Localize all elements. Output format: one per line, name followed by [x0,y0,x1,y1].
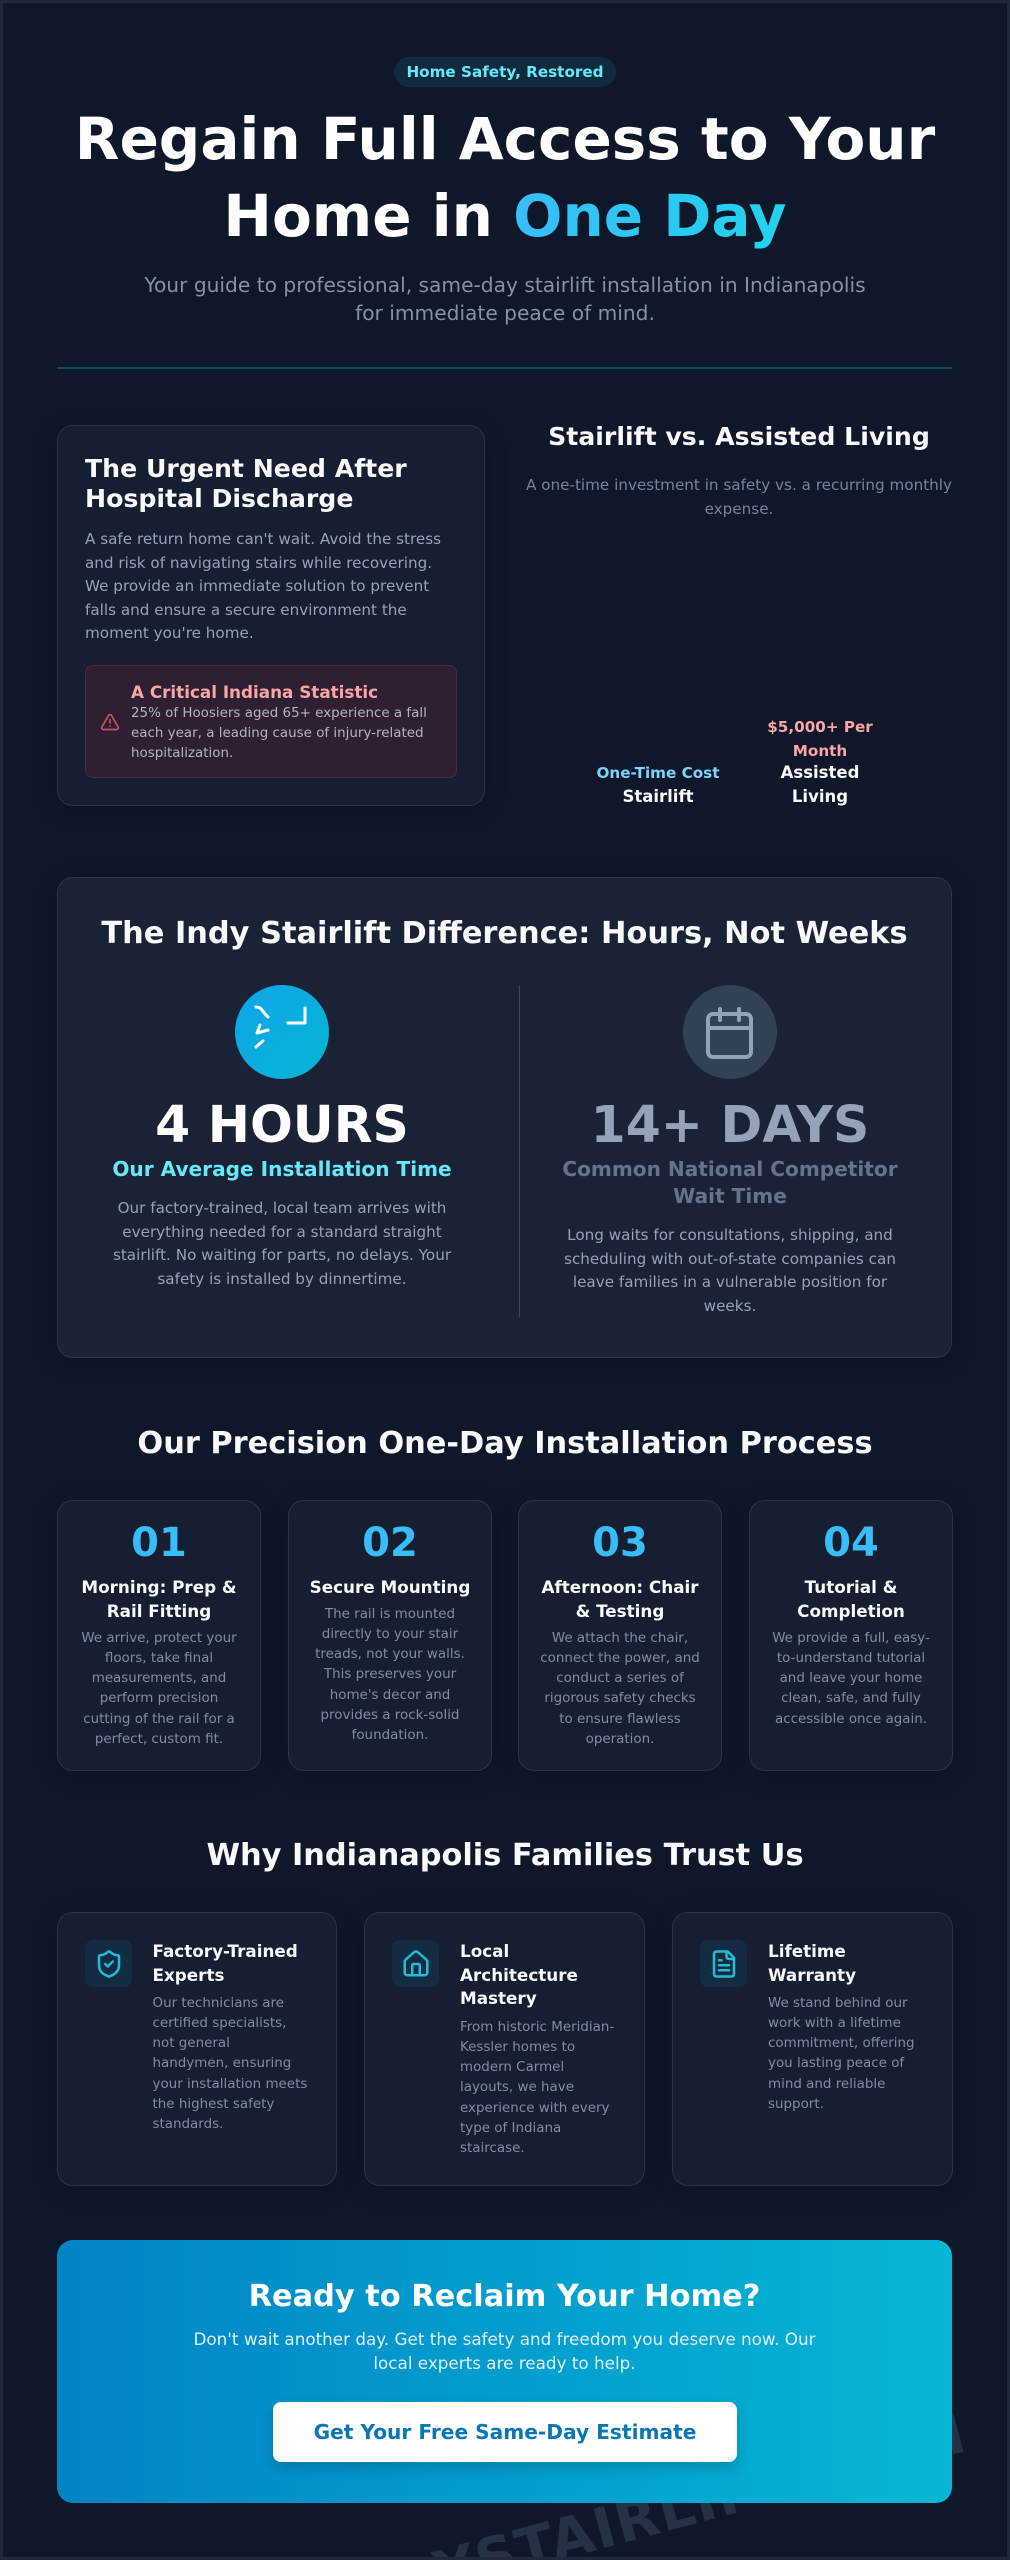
heading: difference: The Indy Stairlift Difference: Hours, Not Weeks [101,916,908,951]
stat description: stairlift. No waiting for parts, no delays. Your [113,1246,451,1264]
step text [540,1631,700,1747]
icon: clock circle [235,985,329,1079]
step text: We provide a full, easy- [772,1631,930,1646]
stat description [113,1199,452,1288]
callout text [131,706,427,761]
icon: document [700,1940,747,1987]
callout text: hospitalization. [131,746,233,761]
badge: home safety [394,57,616,87]
label: assisted living cost: Month [793,742,847,760]
text: urgent need body: A safe return home can't wait. Avoid the stress [85,530,441,548]
card text: you lasting peace of [768,2056,904,2071]
step text: operation. [586,1732,654,1747]
card title: Lifetime [768,1941,846,1961]
panel: step 1 [57,1500,261,1771]
stat: 14+ days: 14+ DAYS [591,1095,869,1154]
step number: 04 [823,1520,879,1566]
card text: handymen, ensuring [152,2056,291,2071]
step text: treads, not your walls. [315,1647,465,1662]
label: stairlift cost [597,764,720,806]
text: comparison subtitle [526,476,952,518]
icon: warning triangle [100,714,120,730]
heading: trust: Why Indianapolis Families Trust Us [206,1838,804,1873]
step text [772,1631,930,1727]
step text: conduct a series of [556,1671,684,1686]
step title [797,1577,905,1620]
card title: Mastery [460,1988,537,2008]
text: comparison subtitle: expense. [705,500,773,518]
step title: Completion [797,1600,905,1620]
card text [460,2020,614,2156]
step title: Afternoon: Chair [541,1577,699,1597]
card text: support. [768,2097,824,2112]
callout text: 25% of Hoosiers aged 65+ experience a fall [131,706,427,720]
card title [768,1941,856,1984]
stat description: safety is installed by dinnertime. [157,1270,407,1288]
card title: Experts [152,1964,224,1984]
step text: to-understand tutorial [777,1651,925,1666]
step text: perfect, custom fit. [95,1732,223,1747]
step text: directly to your stair [322,1627,458,1642]
text: call to action: Don't wait another day. Get the safety and freedom you deserve now. Our [193,2329,816,2349]
step text: rigorous safety checks [544,1691,696,1706]
icon: house [392,1940,439,1987]
card text: your installation meets [152,2077,307,2092]
card text: Kessler homes to [460,2040,575,2055]
step text: connect the power, and [540,1651,700,1666]
step title [541,1577,699,1620]
card text: From historic Meridian- [460,2020,614,2035]
callout heading: A Critical Indiana Statistic [131,682,378,702]
text: urgent need body [85,530,441,642]
icon: shield check [85,1940,132,1987]
text: urgent need body: moment you're home. [85,624,254,642]
stat description: leave families in a vulnerable position for [573,1273,887,1291]
stat: 4 hours: 4 HOURS [155,1095,409,1154]
label: assisted living cost [767,718,873,806]
step text: and leave your home [780,1671,922,1686]
panel: step 2 [288,1500,492,1771]
stat description: everything needed for a standard straight [122,1223,442,1241]
heading: urgent need [85,454,407,513]
title: Home in One Day [223,182,787,250]
heading: urgent need: The Urgent Need After [85,454,407,483]
panel: call to action [57,2240,952,2503]
text: urgent need body: and risk of navigating stairs while recovering. [85,554,432,572]
card text: the highest safety [152,2097,274,2112]
heading: urgent need: Hospital Discharge [85,484,353,513]
card text: layouts, we have [460,2080,574,2095]
card text: not general [152,2036,230,2051]
card text: type of Indiana [460,2121,561,2136]
step title: Rail Fitting [107,1600,211,1620]
step title: & Testing [576,1600,664,1620]
label: stairlift cost: Stairlift [622,787,694,806]
card text [768,1996,915,2112]
callout text: each year, a leading cause of injury-related [131,726,424,741]
text: urgent need body: falls and ensure a secure environment the [85,601,407,619]
step title: Tutorial & [805,1577,897,1597]
step text: perform precision [100,1691,218,1706]
callout: Indiana statistic [85,665,457,778]
panel: hours not weeks [57,877,952,1358]
column: competitor wait time [562,985,898,1315]
step number: 02 [362,1520,418,1566]
step text: floors, take final [105,1651,213,1666]
subtitle [144,273,866,324]
step title: Secure Mounting [310,1577,470,1597]
step text: We attach the chair, [552,1631,688,1646]
stat description: scheduling with out-of-state companies can [564,1250,896,1268]
step text: home's decor and [330,1688,450,1703]
stat description: Long waits for consultations, shipping, and [567,1226,893,1244]
card text: We stand behind our [768,1996,908,2011]
card title [152,1941,298,1984]
label: assisted living cost: Living [792,787,848,806]
panel: factory-trained experts [57,1912,337,2186]
step text: provides a rock-solid [321,1708,459,1723]
step text: clean, safe, and fully [781,1691,921,1706]
panel: step 4 [749,1500,953,1771]
card title: Local [460,1941,509,1961]
card text: standards. [152,2117,223,2132]
step text: measurements, and [92,1671,226,1686]
text: call to action: local experts are ready to help. [373,2353,636,2373]
stat description: Our factory-trained, local team arrives with [118,1199,446,1217]
step text: We arrive, protect your [81,1631,237,1646]
step number: 03 [592,1520,648,1566]
card text: experience with every [460,2101,610,2116]
text: call to action [193,2329,816,2373]
step text: cutting of the rail for a [83,1712,235,1727]
text: urgent need body: We provide an immediate solution to prevent [85,577,429,595]
panel: urgent need after hospital discharge [57,425,485,806]
step title: Morning: Prep & [81,1577,237,1597]
label: assisted living cost: Assisted [781,763,859,782]
card text: Our technicians are [152,1996,284,2011]
badge: home safety: Home Safety, Restored [406,63,604,81]
step text: The rail is mounted [325,1607,455,1622]
card text: commitment, offering [768,2036,915,2051]
button: free estimate: Get Your Free Same-Day Estimate [314,2420,696,2444]
step text: foundation. [352,1728,428,1743]
card title: Factory-Trained [152,1941,298,1961]
panel: step 3 [518,1500,722,1771]
step text: to ensure flawless [559,1712,681,1727]
card text: work with a lifetime [768,2016,901,2031]
card title: Warranty [768,1964,856,1984]
subtitle: for immediate peace of mind. [355,300,655,324]
card text: mind and reliable [768,2077,885,2092]
step text [315,1607,465,1743]
title: Regain Full Access to Your [75,105,935,173]
stat label [562,1157,898,1208]
heading: call to action: Ready to Reclaim Your Home? [249,2279,760,2314]
stat label: Our Average Installation Time [112,1157,452,1181]
title [75,105,936,250]
icon: calendar circle [683,985,777,1079]
column: our installation time [112,985,452,1288]
card text: staircase. [460,2141,525,2156]
label: stairlift cost: One-Time Cost [597,764,719,782]
stat description [564,1226,896,1315]
step title [81,1577,237,1620]
card title: Architecture [460,1964,578,1984]
card text [152,1996,307,2132]
stat label: Wait Time [673,1184,787,1208]
step text [81,1631,237,1747]
button: free estimate [273,2402,737,2462]
panel: local architecture mastery [364,1912,645,2186]
stat description: weeks. [704,1297,756,1315]
subtitle: Your guide to professional, same-day stairlift installation in Indianapolis [144,273,866,297]
stat label: Common National Competitor [562,1157,898,1181]
label: assisted living cost: $5,000+ Per [767,718,873,736]
panel: stairlift vs assisted living [526,422,952,806]
card text: certified specialists, [152,2016,286,2031]
step number: 01 [131,1520,187,1566]
heading: comparison: Stairlift vs. Assisted Living [548,422,930,451]
text: comparison subtitle: A one-time investment in safety vs. a recurring monthly [526,476,952,494]
card text: modern Carmel [460,2060,564,2075]
card title [460,1941,578,2008]
step text: This preserves your [324,1667,456,1682]
heading: process: Our Precision One-Day Installation Process [137,1426,873,1460]
panel: lifetime warranty [672,1912,953,2186]
step text: accessible once again. [775,1712,927,1727]
